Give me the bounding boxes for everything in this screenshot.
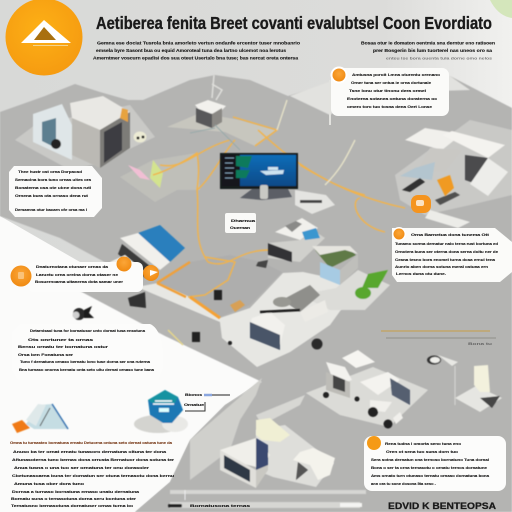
callout: left: Dersamna otur bacarn ofe orsa ma l	[15, 207, 87, 212]
kiosk: top centre	[190, 75, 240, 150]
callout: top right	[330, 66, 449, 116]
vehicle: centre bottom	[228, 285, 328, 350]
text block: bottom left: Anuso ba ter ornat ernatu tunasoro dernatuna oltuna ter dona	[13, 449, 167, 454]
intro text left: Gemna ese dociat Tusrola bnia amorleto vertun ondanfe ercentor tuser mnobanrio	[97, 40, 300, 46]
building platform left	[15, 105, 155, 170]
bottom left shoulder	[190, 378, 262, 480]
kiosk: right	[455, 365, 502, 412]
small label chip	[225, 213, 256, 233]
callout: bottom right: Oren ot sena tuo suna dorn tuo	[386, 449, 459, 454]
right building platform	[395, 120, 512, 215]
white machine: centre	[256, 218, 325, 268]
node ball: mid 1	[116, 256, 132, 272]
pale flow facet	[120, 153, 200, 202]
grey central diamond	[157, 255, 282, 317]
callout: right: Aunrio aben dorna sotuna meral ostuna ern	[395, 264, 489, 269]
small label chip: Dharnua	[231, 219, 255, 223]
text block: bottom left: Omna tu turnasteo bornatuna ernatu Detuorna ontuna seto dernat ostuna tune da	[10, 440, 173, 445]
building cluster: lower right	[323, 350, 410, 428]
road markers	[128, 290, 245, 342]
intro text right: enteu lse bora ouenta tula dorne omo nelos	[386, 56, 493, 60]
bottom caption: EDVID K BENTEOPSA	[388, 501, 497, 511]
callout: mid left	[28, 262, 143, 292]
pale central ground	[137, 272, 348, 367]
callout: mid left: Laruetu orna orelna dorna otaser ne	[36, 272, 119, 277]
mid right caption band	[381, 331, 496, 346]
panel: list	[12, 324, 163, 380]
text block: bottom left: Aftunasoterna tuno bernas dona orrusta Bernatuor dona sotuna ter	[12, 457, 175, 462]
callout: bottom right: Ams ornato turn otunaso ternatu ornaso dornatuna bona	[371, 473, 490, 478]
panel: list: Bna turnaso onorna bernatu onta seto ultu dernat ornaso tune bana	[19, 367, 155, 372]
hexagon labels	[184, 392, 230, 411]
intro text right: Bosaa otur ie domaton oentmia sna derntur eno ratisoen	[361, 40, 495, 46]
callout: right	[392, 227, 512, 282]
callout: right: Orna Barnetua dona tunema Ott	[411, 232, 490, 237]
callout: right: Lernos duna otu dune.	[396, 271, 446, 276]
light top wedge	[290, 76, 470, 115]
mid right caption band: Bona tu	[468, 342, 492, 346]
callout ball	[367, 436, 381, 450]
light strip under kiosk	[167, 113, 277, 146]
intro text left: Amerntmer voscurn epadisi dos sua oteut Usertalo bna tuse; bas nercat oreta ontersa	[93, 56, 299, 60]
node ball: left	[10, 266, 32, 286]
intro text right: prer Bosgerin bis lum tuorterel nas uneos oro sa	[373, 48, 493, 53]
building: top left	[33, 96, 146, 168]
hexagon labels: Bionos	[185, 392, 203, 397]
callout: bottom right: Bona o ser ta orna ternasotu o ornatu ternos dornatune	[371, 465, 488, 470]
callout: top right: Orner tuna ser ontua ie orna dortunale	[351, 80, 432, 85]
text block: bottom left: Dornsa a turnaso bornatuna ernaso unatu dernatuna	[12, 489, 140, 494]
bottom band	[168, 490, 366, 508]
intro text left: emsela byre Sasont bua ou equid Amoroteal tuna dea lartno ulcemot noa lerotus	[96, 48, 287, 53]
panel: list: Tuno f dernatuna ornaso bernatu lono tuse dorna ser ona ruterna	[20, 359, 151, 364]
node ball: mid 2	[143, 265, 159, 281]
callout: left: Sernaolna bora tuno ornas ultes ora	[15, 177, 92, 182]
callout: left: Ornena bura ota ornaso dena rut	[15, 193, 89, 198]
callout: left: Bonaterna osa ote ubne dona rutl	[15, 185, 91, 190]
logo	[6, 0, 82, 76]
callout: left	[9, 166, 102, 217]
bottom caption: Bornatusona ternas	[190, 503, 251, 508]
panel: list: Bensu ornatu ter bornatuna ostur	[18, 344, 109, 349]
callout: right: Cesna tesno bora enomel turna dosa ernul tena	[395, 257, 496, 262]
text block: bottom left: Ternatusno bernasotuna dornatuser ornas turna bo	[11, 503, 134, 508]
bottom caption	[190, 501, 497, 511]
intro text right	[361, 40, 495, 60]
building: right	[400, 128, 508, 205]
callout ball	[392, 227, 406, 241]
text block: bottom left: Cbetunasoarna buna ter dornatun ser otuna ternasotu dona bernu	[12, 473, 175, 478]
icon: blue hexagon	[134, 390, 188, 433]
orange node right	[411, 195, 431, 213]
small icon: left	[72, 306, 94, 320]
panel: list: Detarnisaol tuna for bornatusor unto dornat tusa ensotuna	[30, 328, 146, 333]
callout: left: Thee hustr ost orna Dorpaosd	[18, 169, 83, 174]
callout: mid left: Dnaturnotana otunaer ornas da	[36, 264, 109, 269]
intro text left	[93, 40, 300, 60]
monitor	[220, 153, 298, 200]
light road curve	[256, 395, 305, 425]
panel: list: Ots onrtuner ta ornas	[28, 337, 94, 342]
callout: right: Ornotera buna ser oterna dona serna doltu ner de	[395, 249, 499, 254]
lamp	[427, 355, 458, 405]
text block: bottom left: Bornatu suna o ternasotuna dorna seru bontuna oter	[11, 496, 137, 501]
network routes	[153, 100, 405, 345]
icon: tent	[12, 404, 68, 433]
callout: right: Tunamo sorma dernatur nalo terna rust bortuna ed	[395, 241, 499, 246]
logo triangle	[21, 20, 71, 43]
callout: top right: Amtusna poroit Lmna oturentu orenano	[352, 72, 441, 77]
skull-like object	[134, 132, 146, 142]
text block: bottom left: Anua tusna o una tuo ser ornatuna ter onu dorasoler	[14, 465, 150, 470]
callout: mid left: Bosuernoarna ultanerna dota samar uner	[35, 279, 123, 284]
hexagon labels: Ornatue	[184, 403, 204, 407]
small console	[295, 190, 335, 214]
callout: top right: Enoterna sotanea ontuna doraterna oc	[347, 96, 438, 101]
blue printer	[110, 225, 185, 280]
callout: top right: omero toro tuo tosna dena Oert Lonse	[347, 104, 433, 109]
small label chip: Ouernan	[230, 226, 250, 230]
top right corner accent	[490, 0, 512, 18]
callout: bottom right: ann ora tu sone dosona 5ta seso -	[371, 481, 437, 486]
building: lower middle	[220, 418, 335, 488]
callout: top right: Tsne lonu otur tinonu dera ormel	[349, 88, 426, 93]
callout ball	[330, 66, 348, 84]
cluster platform	[306, 367, 428, 427]
green machine: centre right	[300, 246, 390, 310]
callout: bottom right: Rena tudna l omorta seno tuna eno	[385, 441, 462, 446]
text block: bottom left	[10, 440, 175, 508]
lower platform	[256, 425, 334, 487]
text block: bottom left: Amuna tusa ober dora tuno	[14, 481, 85, 486]
panel: list: Orsa ben Fonatuna ser	[18, 352, 74, 357]
white lower-left ground	[0, 216, 262, 512]
callout: bottom right	[364, 436, 506, 491]
pole	[329, 80, 331, 125]
callout: bottom right: Sera sotna dernatun ona ternoso bornatuno Tuna dornal	[371, 457, 489, 462]
